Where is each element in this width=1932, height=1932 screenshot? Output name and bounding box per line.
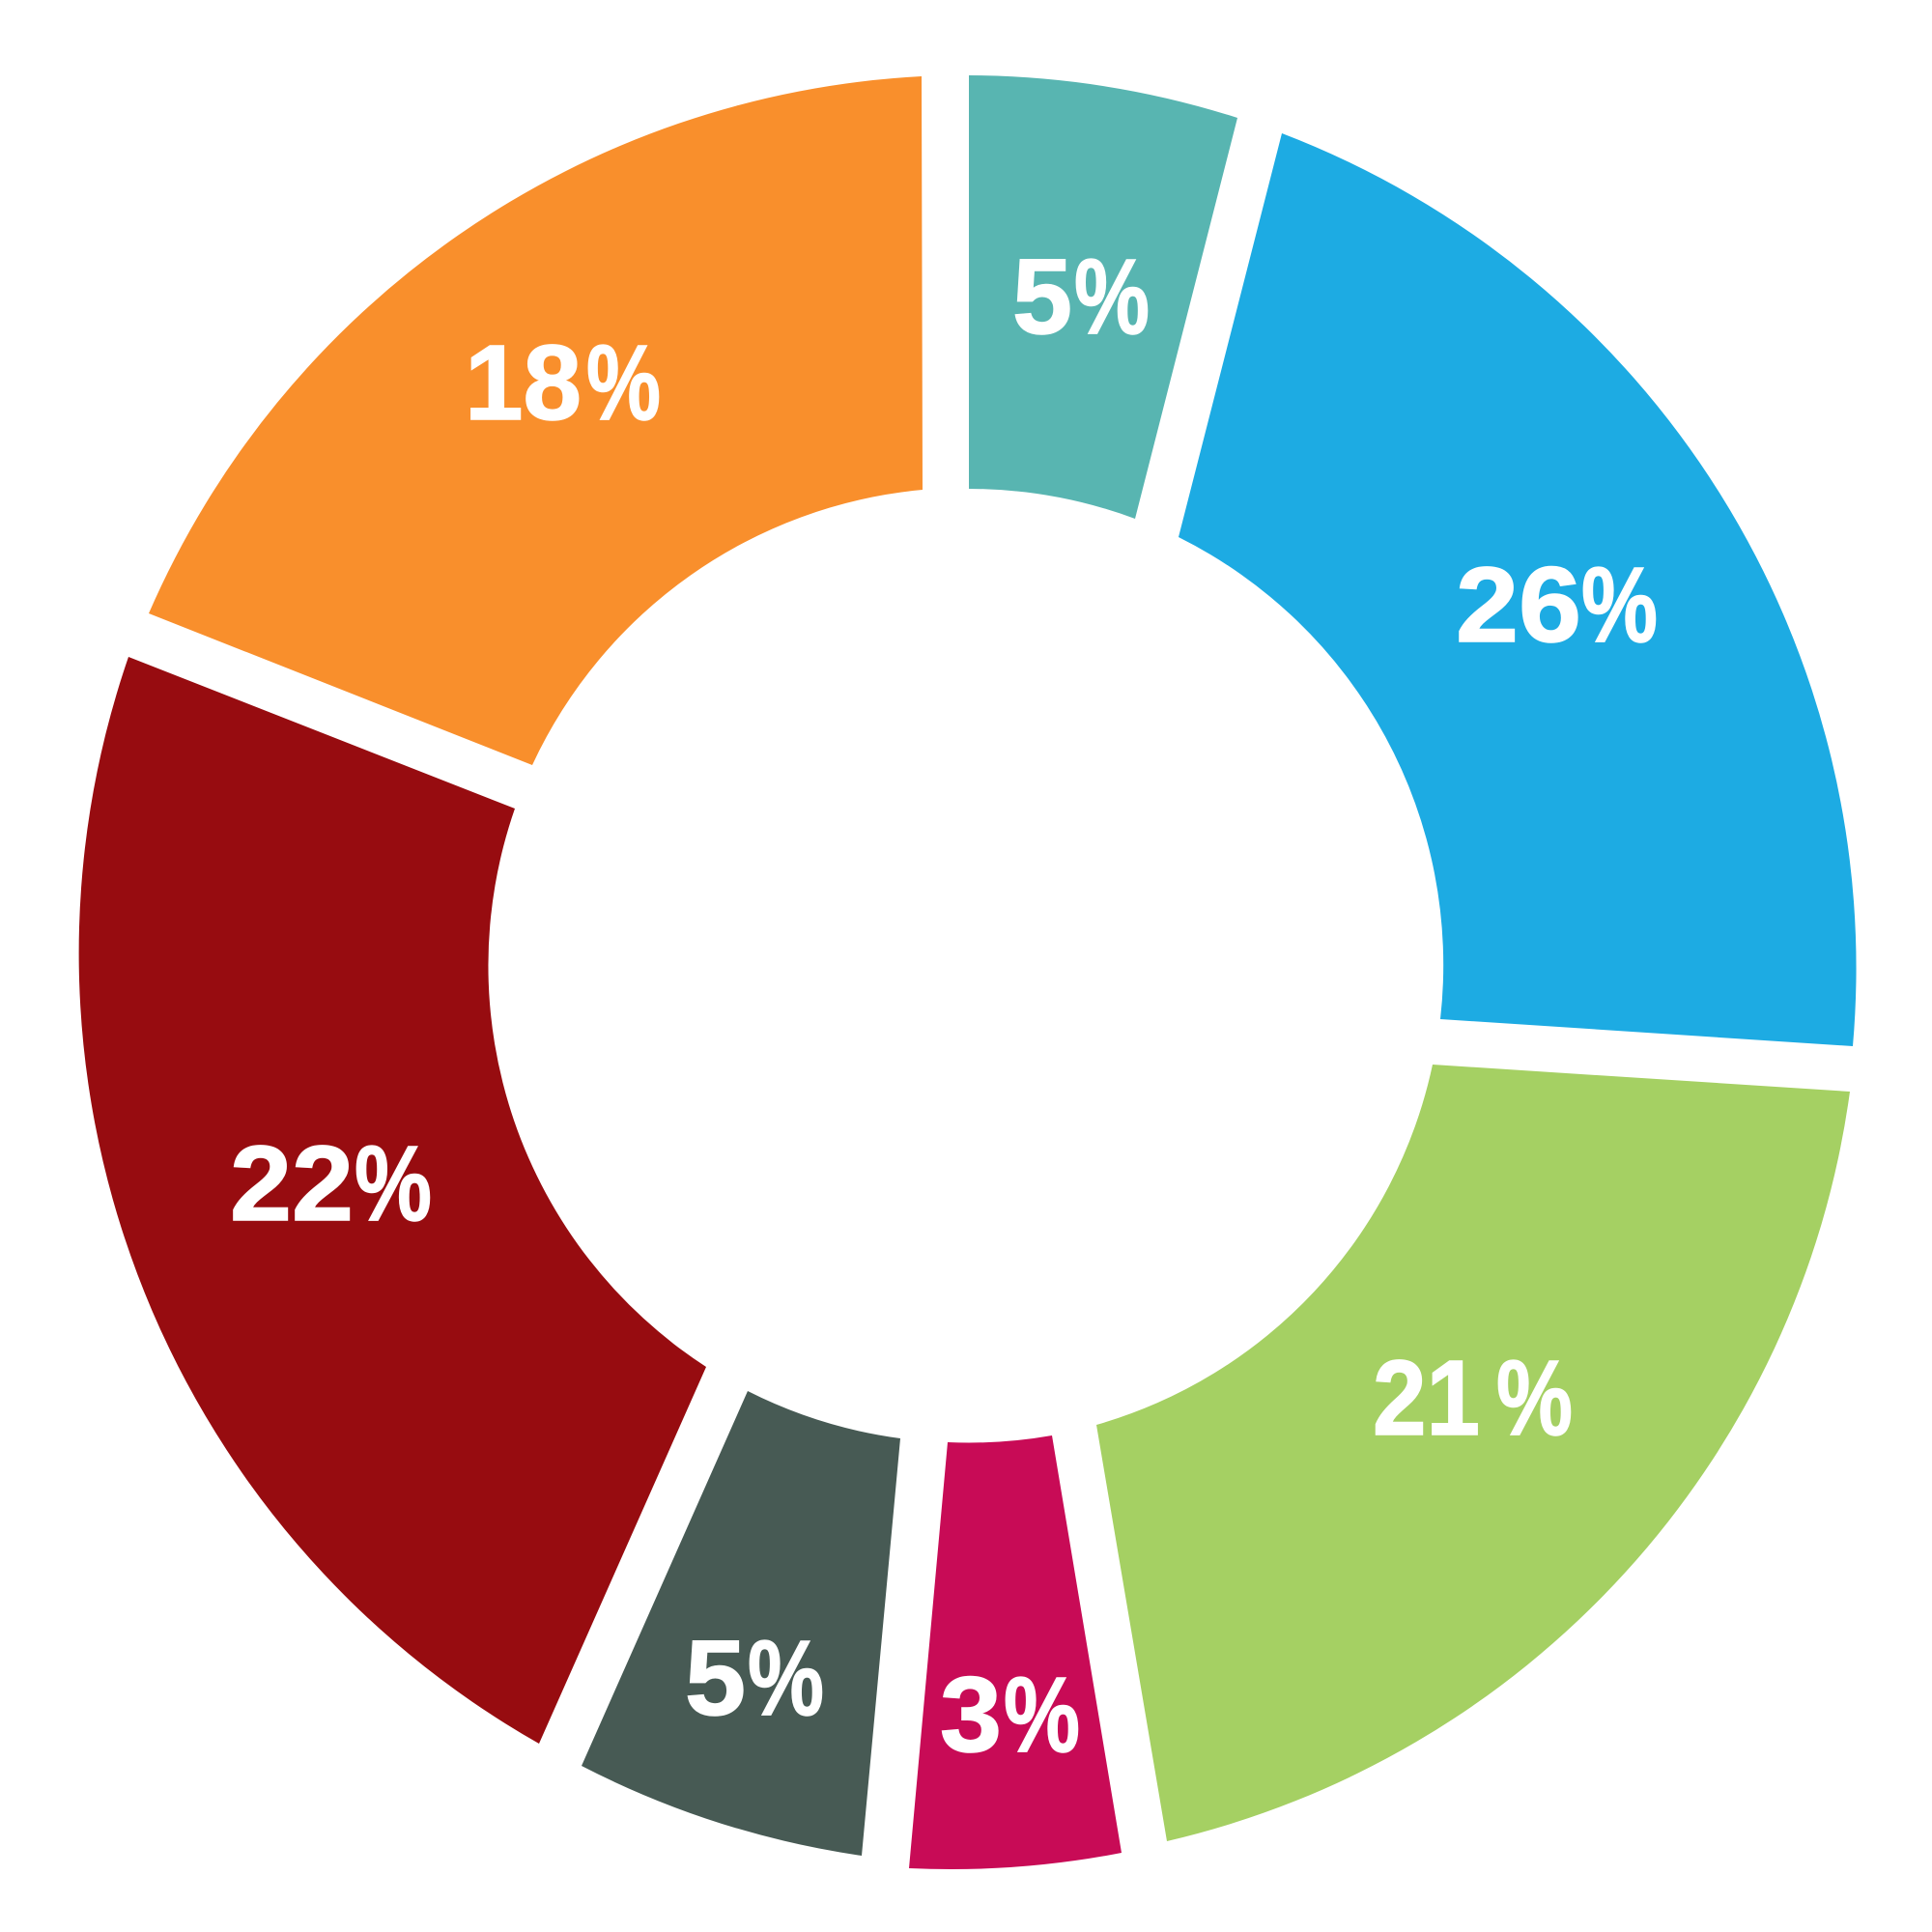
label: 18% orange: %	[586, 324, 661, 442]
label: 5% teal: %	[1074, 238, 1150, 356]
label: 5% slate: %	[748, 1619, 824, 1738]
label: 21% green: 21	[1373, 1339, 1480, 1458]
label: 26% blue: %	[1581, 546, 1658, 665]
label: 5% teal: 5	[1012, 238, 1072, 356]
label: 22% dark red: 22	[230, 1124, 354, 1243]
slice: magenta 3%	[909, 1435, 1122, 1869]
label: 5% slate: 5	[685, 1619, 746, 1738]
slice: slate 5%	[582, 1391, 900, 1856]
slice: teal 5%	[969, 75, 1237, 519]
slice: blue 26%	[1179, 133, 1857, 1046]
label: 21% green: %	[1496, 1339, 1573, 1458]
slice: dark red 22%	[79, 657, 706, 1744]
label: 3% magenta: %	[1004, 1656, 1080, 1775]
slice: green 21%	[1096, 1065, 1850, 1841]
slice: orange 18%	[149, 76, 923, 765]
label: 22% dark red: %	[355, 1124, 432, 1243]
label: 3% magenta: 3	[940, 1656, 1002, 1775]
label: 26% blue: 26	[1456, 546, 1581, 665]
label: 18% orange: 18	[465, 324, 582, 442]
